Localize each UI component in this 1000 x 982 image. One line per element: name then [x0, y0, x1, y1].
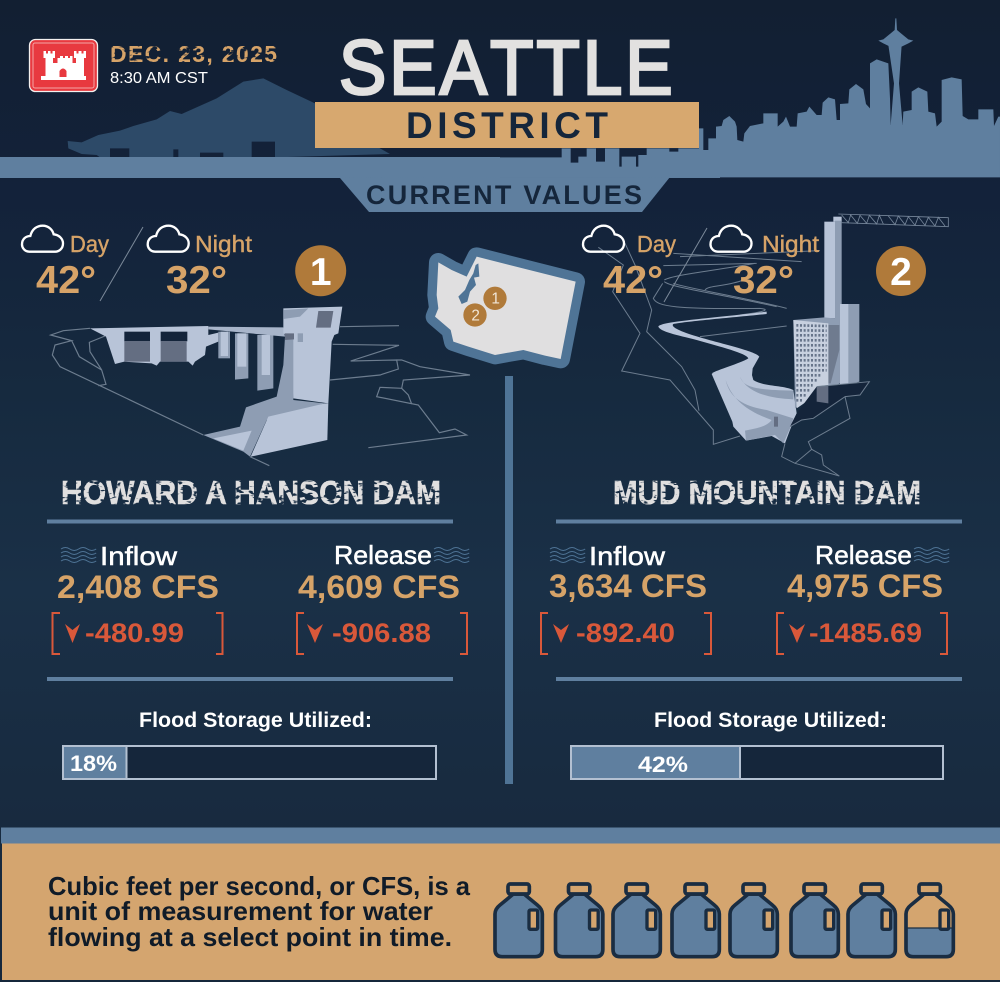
mountain silhouette	[68, 78, 390, 157]
flood storage bar 18%	[63, 746, 436, 779]
Washington state map	[435, 257, 576, 359]
map marker 2: 2	[471, 307, 480, 324]
illustration: Mud Mountain dam	[598, 214, 948, 476]
dam name: HOWARD A HANSON DAM	[61, 474, 441, 511]
time: 8:30 AM CST	[110, 70, 208, 87]
flood storage label: Flood Storage Utilized:	[654, 709, 887, 732]
map marker 1	[483, 287, 507, 310]
day weather: Day	[637, 231, 676, 257]
panel: Mud Mountain Dam	[541, 214, 962, 779]
number badge 2	[876, 246, 926, 296]
release: 4,609 CFS	[298, 569, 460, 605]
day weather: 42°	[603, 259, 663, 302]
release: -1485.69	[809, 618, 922, 648]
inflow: 3,634 CFS	[549, 568, 707, 604]
map marker 2	[463, 303, 487, 327]
release	[297, 540, 469, 654]
night weather: Night	[762, 231, 820, 257]
footer band	[1, 828, 1000, 844]
dam name: MUD MOUNTAIN DAM	[613, 474, 921, 511]
title: Seattle: SEATTLE	[339, 24, 676, 111]
day weather	[583, 226, 676, 302]
day weather: Day	[70, 231, 109, 257]
release: -906.88	[332, 618, 431, 648]
flood storage bar 42%	[571, 746, 943, 779]
footer panel	[2, 844, 1000, 980]
night weather: 32°	[166, 259, 227, 302]
footer explanation text: flowing at a select point in time.	[48, 922, 452, 952]
current values label: CURRENT VALUES	[366, 180, 642, 210]
skyline and header band	[0, 18, 1000, 178]
inflow	[541, 541, 711, 654]
inflow: Inflow	[589, 541, 665, 571]
night weather: 32°	[733, 259, 794, 302]
current values tab	[340, 177, 670, 212]
inflow: 2,408 CFS	[57, 569, 219, 605]
release	[777, 540, 949, 654]
date: DEC. 23, 2025	[110, 41, 277, 67]
flood storage label: Flood Storage Utilized:	[139, 709, 372, 732]
footer explanation text	[48, 871, 471, 952]
illustration: Howard A Hanson dam	[51, 307, 470, 466]
release: 4,975 CFS	[787, 568, 943, 604]
crane	[838, 214, 948, 227]
release: Release	[334, 540, 432, 570]
day weather	[22, 226, 109, 302]
district banner	[315, 102, 699, 148]
footer explanation text: unit of measurement for water	[48, 896, 433, 926]
day weather: 42°	[36, 259, 96, 302]
number badge 1	[295, 245, 346, 296]
night weather: Night	[195, 231, 253, 257]
release: Release	[815, 540, 912, 570]
footer explanation text: Cubic feet per second, or CFS, is a	[48, 871, 471, 901]
panel: Howard A Hanson Dam	[22, 226, 470, 779]
number badge 2: 2	[890, 251, 912, 294]
water jug icons	[495, 884, 953, 957]
district label: DISTRICT	[406, 105, 608, 146]
inflow	[52, 541, 222, 654]
inflow: Inflow	[100, 541, 177, 571]
inflow: -480.99	[85, 618, 184, 648]
night weather	[148, 226, 253, 302]
number badge 1: 1	[310, 251, 332, 294]
center divider	[505, 376, 513, 784]
flood storage bar 42%: 42%	[638, 752, 688, 777]
inflow: -892.40	[576, 618, 675, 648]
flood storage bar 18%: 18%	[70, 751, 117, 776]
map marker 1: 1	[491, 291, 500, 308]
USACE castle logo	[30, 40, 98, 92]
night weather	[710, 226, 820, 302]
